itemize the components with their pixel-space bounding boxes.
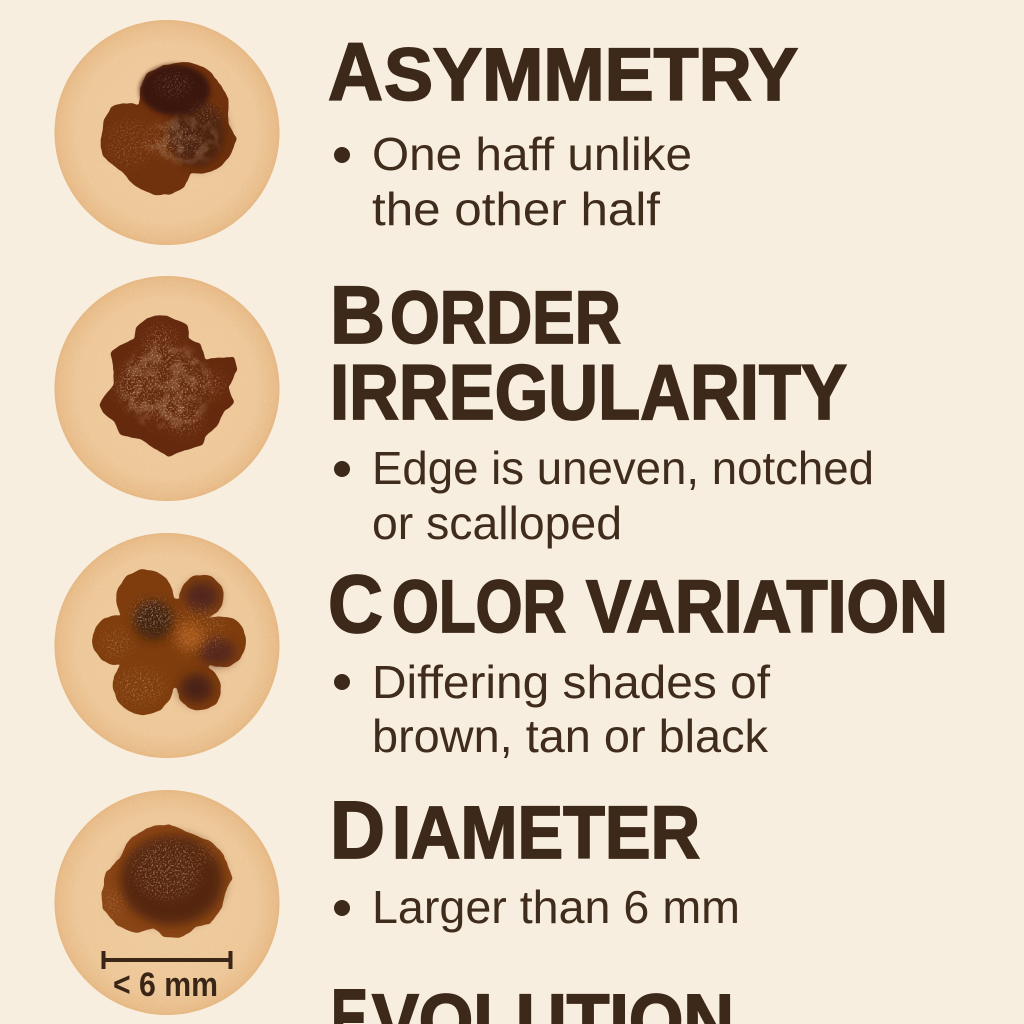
text: border description [334, 442, 874, 549]
text: border description: or scalloped [372, 497, 622, 549]
text: color description: Differing shades of [372, 656, 770, 708]
text: color description: brown, tan or black [372, 710, 769, 762]
panel: border irregularity mole image [54, 276, 280, 501]
panel: color variation mole image [54, 533, 280, 758]
text: border description: Edge is uneven, notched [372, 442, 874, 494]
text: asymmetry description [334, 128, 692, 235]
heading: diameter: IAMETER [392, 791, 700, 874]
heading: color variation [328, 559, 948, 650]
heading: asymmetry: SYMMETRY [384, 33, 798, 116]
text: asymmetry description: One haff unlike [372, 128, 692, 180]
heading: asymmetry: A [328, 27, 383, 118]
heading: color variation: VARIATION [586, 565, 948, 648]
text: color description [334, 656, 770, 762]
panel: asymmetry mole image [54, 20, 280, 245]
heading: color variation: OLOR [392, 565, 566, 648]
panel: diameter mole image [54, 790, 280, 1015]
heading: border irregularity: IRREGULARITY [330, 348, 847, 436]
text: asymmetry description: the other half [372, 183, 660, 235]
scale bar: less than 6 mm: < 6 mm [113, 966, 218, 1004]
heading: border irregularity [330, 270, 847, 436]
scale bar: less than 6 mm [104, 951, 230, 1004]
text: diameter description: Larger than 6 mm [372, 881, 740, 933]
heading: color variation: C [328, 559, 383, 650]
heading: diameter: D [330, 785, 385, 876]
heading: border irregularity: ORDER [390, 276, 621, 359]
heading: border irregularity: B [330, 270, 385, 361]
